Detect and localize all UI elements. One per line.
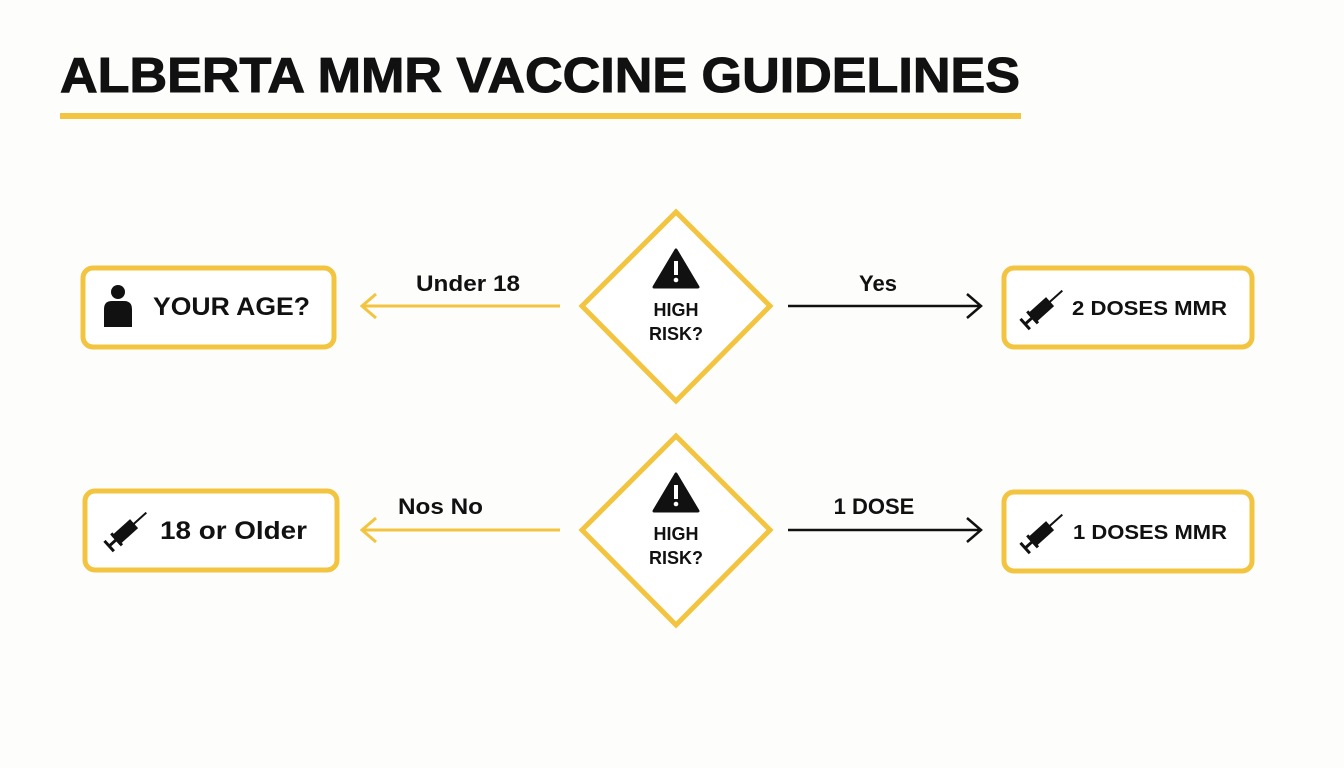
- arrow: yes: Yes: [859, 271, 897, 296]
- box: 1 dose: [1004, 492, 1252, 571]
- diamond: high risk 1: [582, 212, 770, 401]
- box: your age: [83, 268, 334, 347]
- arrow: under 18: Under 18: [416, 271, 520, 296]
- diamond: high risk 1: HIGH: [654, 300, 698, 320]
- icon: syringe: [104, 507, 152, 552]
- box: 2 doses: 2 DOSES MMR: [1072, 298, 1228, 320]
- arrow: 1 dose: 1 DOSE: [834, 494, 914, 519]
- diamond: high risk 2: RISK?: [649, 548, 703, 568]
- diamond: high risk 2: HIGH: [654, 524, 698, 544]
- arrow: yes: [788, 271, 981, 318]
- box: 18 or older: [85, 491, 337, 570]
- icon: warning: [654, 250, 698, 287]
- box: 2 doses: [1004, 268, 1252, 347]
- box: your age: YOUR AGE?: [153, 293, 310, 321]
- icon: warning: [654, 474, 698, 511]
- arrow: 1 dose: [788, 494, 981, 542]
- icon: person: [104, 285, 132, 327]
- box: 18 or older: 18 or Older: [160, 517, 307, 545]
- box: 1 dose: 1 DOSES MMR: [1073, 522, 1228, 544]
- arrow: nos no: Nos No: [398, 494, 483, 519]
- icon: syringe: [1020, 509, 1068, 554]
- icon: syringe: [1020, 285, 1068, 330]
- diamond: high risk 2: [582, 436, 770, 625]
- arrow: under 18: [362, 271, 560, 318]
- title: ALBERTA MMR VACCINE GUIDELINES: [60, 49, 1020, 103]
- diamond: high risk 1: RISK?: [649, 324, 703, 344]
- arrow: nos no: [362, 494, 560, 542]
